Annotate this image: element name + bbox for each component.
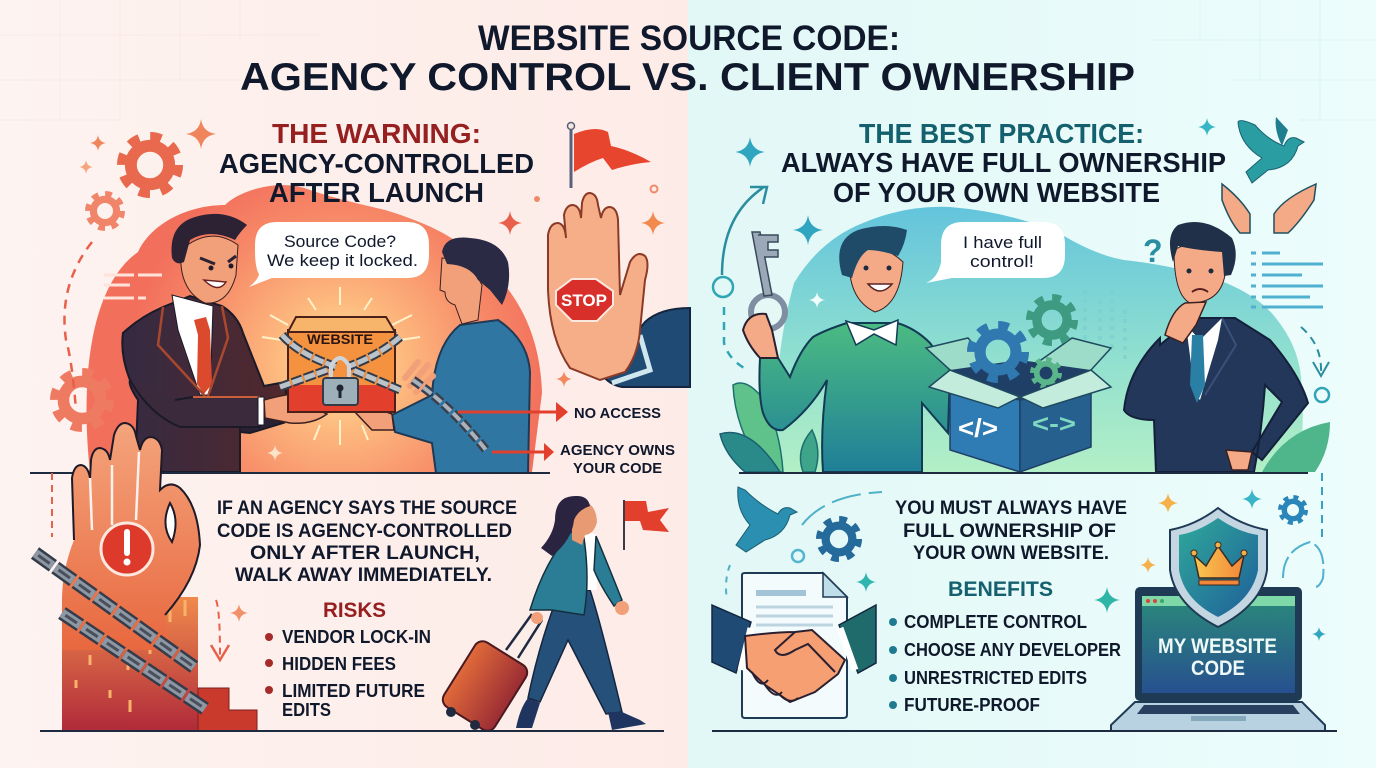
risks list: LIMITED FUTURE — [282, 681, 425, 701]
title: WEBSITE SOURCE CODE: — [478, 19, 900, 58]
character: client in blue jacket — [353, 238, 530, 473]
arm chain on client — [413, 380, 486, 450]
heading: the best practice: ALWAYS HAVE FULL OWNERSHIP — [781, 147, 1226, 178]
benefits list — [889, 578, 1121, 715]
background: warning side — [0, 0, 688, 768]
risks list: VENDOR LOCK-IN — [282, 627, 431, 647]
callout: no access arrow: NO ACCESS — [574, 405, 661, 422]
speech bubble: owner: control! — [970, 252, 1034, 271]
icon: red building stairs — [62, 597, 257, 731]
title — [240, 19, 1135, 99]
icon: laptop: CODE — [1191, 657, 1245, 680]
icon: locked website box — [262, 287, 420, 445]
icon: shield with crown — [1170, 508, 1267, 627]
benefits list: CHOOSE ANY DEVELOPER — [904, 640, 1121, 660]
icon: heavy chains — [35, 553, 207, 710]
text block: warning message — [217, 498, 517, 586]
callout: agency owns your code arrow — [492, 442, 675, 477]
risks list: HIDDEN FEES — [282, 654, 396, 674]
heading: the best practice: THE BEST PRACTICE: — [859, 118, 1144, 149]
callout: agency owns your code arrow: YOUR CODE — [573, 460, 662, 477]
benefits list: UNRESTRICTED EDITS — [904, 668, 1087, 688]
icon: key — [743, 232, 785, 358]
heading: the best practice: OF YOUR OWN WEBSITE — [833, 177, 1160, 208]
text block: ownership message — [895, 498, 1127, 564]
benefits list: COMPLETE CONTROL — [904, 612, 1087, 632]
text block: ownership message: FULL OWNERSHIP OF — [903, 521, 1116, 542]
arm chain highlight — [413, 380, 486, 450]
speech bubble: owner: I have full — [963, 233, 1042, 252]
text block: warning message: CODE IS AGENCY-CONTROLLED — [217, 521, 512, 542]
icon: small dove and gear — [726, 487, 882, 600]
icon: small red flag — [624, 500, 669, 550]
icon: open box with gears and code: <-> — [1032, 410, 1076, 438]
icon: stop hand: STOP — [561, 291, 607, 310]
speech bubble: agency — [249, 222, 429, 287]
icon: document with handshake — [712, 573, 876, 718]
icon: open box with gears and code — [926, 298, 1111, 472]
dashed arrow: left bottom — [52, 473, 248, 660]
benefits list: FUTURE-PROOF — [904, 695, 1040, 715]
character: worried man in suit: ? — [1143, 233, 1163, 269]
plants — [720, 383, 1330, 472]
panel: best practice illustration blob — [775, 207, 1303, 472]
character: woman walking away with suitcase — [439, 496, 646, 734]
callout: no access arrow — [458, 402, 661, 422]
icon: red flag — [568, 122, 651, 188]
heading: the warning — [219, 118, 534, 208]
heading: the warning: AFTER LAUNCH — [269, 177, 484, 208]
speech bubble: agency: Source Code? — [284, 232, 396, 251]
icon: locked website box: WEBSITE — [307, 331, 373, 347]
character: happy owner holding key — [759, 226, 950, 472]
text block: warning message: ONLY AFTER LAUNCH, — [250, 543, 480, 564]
decorative icons: best practice sparkles and arrows — [713, 118, 1329, 402]
decorative icons: laptop area sparkles — [1094, 473, 1326, 641]
callout: agency owns your code arrow: AGENCY OWNS — [560, 442, 675, 459]
icon: stop hand — [548, 193, 690, 387]
speech bubble: agency: We keep it locked. — [267, 251, 418, 270]
text block: warning message: WALK AWAY IMMEDIATELY. — [235, 565, 492, 586]
character: worried man in suit — [1124, 222, 1308, 472]
icon: laptop — [1111, 587, 1325, 731]
risks list — [265, 599, 431, 720]
character: agency man in suit — [122, 214, 327, 472]
decorative icons: warning gears and sparkles — [54, 119, 665, 461]
benefits list: BENEFITS — [948, 578, 1053, 601]
heading: the warning: AGENCY-CONTROLLED — [219, 148, 534, 179]
text block: warning message: IF AN AGENCY SAYS THE SOURCE — [217, 498, 517, 519]
risks list: EDITS — [282, 700, 331, 720]
heading: the warning: THE WARNING: — [272, 118, 481, 149]
text block: ownership message: YOU MUST ALWAYS HAVE — [895, 498, 1127, 519]
heading: the best practice — [781, 118, 1226, 208]
speech bubble: owner — [926, 222, 1065, 283]
panel: warning illustration background blob — [87, 185, 542, 472]
text block: ownership message: YOUR OWN WEBSITE. — [913, 543, 1109, 564]
icon: dove and open hands — [1222, 117, 1316, 233]
icon: open box with gears and code: </> — [958, 413, 998, 443]
title: AGENCY CONTROL VS. CLIENT OWNERSHIP — [240, 56, 1135, 99]
icon: chained hand with warning — [62, 423, 200, 650]
icon: laptop: MY WEBSITE — [1158, 635, 1277, 658]
risks list: RISKS — [323, 599, 386, 622]
background: best practice side — [688, 0, 1376, 768]
